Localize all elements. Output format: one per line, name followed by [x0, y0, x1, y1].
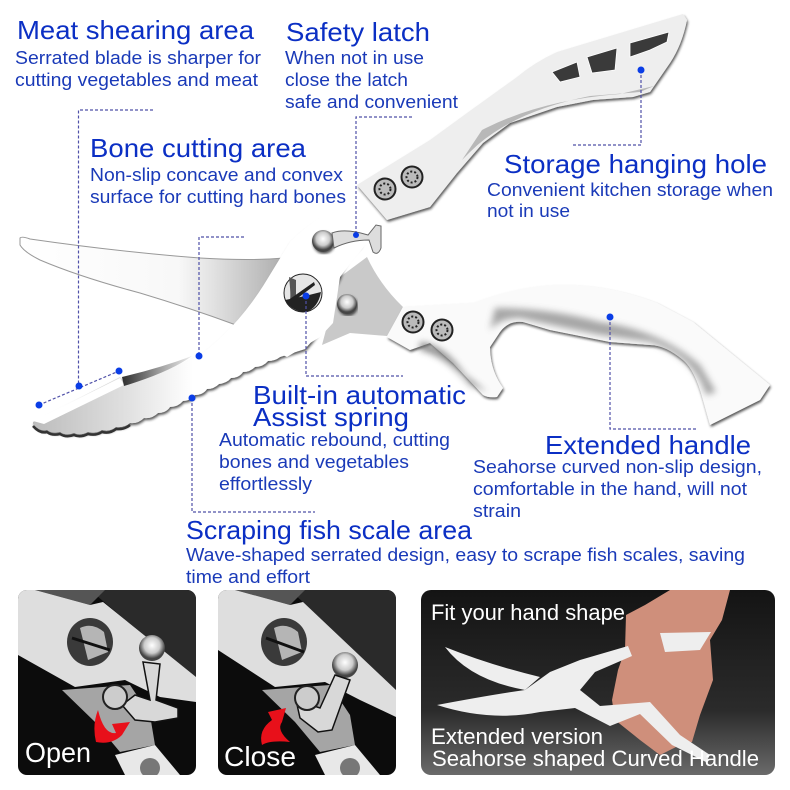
text: bone cutting area: Bone cutting area [90, 133, 307, 163]
spring wedge behind pivot [322, 257, 403, 345]
text: scraping fish scale area: Scraping fish scale area [186, 515, 473, 545]
text: built-in automatic assist spring [219, 380, 466, 494]
text: safety latch: safe and convenient [285, 92, 458, 112]
text: meat shearing area: Serrated blade is sharper for [15, 48, 261, 68]
white spine of lower blade [33, 378, 124, 424]
panel: open [18, 590, 196, 778]
text: storage hanging hole: Storage hanging hole [504, 149, 767, 179]
icon: red close arrow [261, 708, 290, 745]
serrated edge shadow [33, 425, 130, 436]
text: built-in automatic assist spring: effortlessly [219, 474, 312, 494]
scissors illustration [20, 14, 770, 436]
text: storage hanging hole [487, 149, 773, 221]
text: extended handle: Extended handle [545, 430, 751, 460]
text: built-in automatic assist spring: Built-in automatic [253, 380, 466, 410]
lower blade with serrated edge [33, 212, 366, 434]
text: extended handle: Seahorse curved non-slip design, [473, 457, 762, 477]
panel: close [218, 590, 396, 778]
spring pins [312, 230, 357, 314]
text: scraping fish scale area [186, 515, 745, 587]
text: bone cutting area: surface for cutting hard bones [90, 187, 346, 207]
upper handle [357, 14, 687, 220]
mini scissors [437, 632, 711, 762]
hand [612, 590, 730, 755]
icon: red open arrow [94, 710, 130, 743]
text: built-in automatic assist spring: Automatic rebound, cutting [219, 430, 450, 450]
text: built-in automatic assist spring: bones and vegetables [219, 452, 409, 472]
text: extended handle: strain [473, 501, 521, 521]
label: fit your hand shape: Fit your hand shape [431, 600, 625, 625]
text: safety latch: close the latch [285, 70, 408, 90]
text: storage hanging hole: Convenient kitchen storage when [487, 180, 773, 200]
upper blade [20, 237, 284, 325]
text: safety latch [285, 17, 458, 112]
text: meat shearing area [15, 15, 261, 90]
pivot plate [262, 187, 383, 357]
callout lines and dots [36, 66, 697, 512]
label: open: Open [25, 737, 91, 768]
handle rivets [402, 312, 452, 340]
text: meat shearing area: cutting vegetables and meat [15, 70, 258, 90]
text: bone cutting area [90, 133, 346, 207]
text: safety latch: When not in use [285, 48, 424, 68]
safety latch piece [332, 225, 381, 253]
pivot screw [284, 274, 322, 312]
text: safety latch: Safety latch [286, 17, 430, 47]
handle rivets [374, 166, 422, 200]
text: scraping fish scale area: Wave-shaped serrated design, easy to scrape fish scales, saving [186, 545, 745, 565]
text: extended handle: comfortable in the hand, will not [473, 479, 747, 499]
text: extended handle [473, 430, 762, 521]
lower handle [387, 285, 770, 425]
text: meat shearing area: Meat shearing area [17, 15, 255, 45]
label: extended version: Extended version [431, 724, 603, 749]
label: close: Close [224, 741, 296, 772]
storage hanging holes [552, 32, 669, 82]
text: bone cutting area: Non-slip concave and convex [90, 165, 343, 185]
label: seahorse shaped curved handle: Seahorse shaped Curved Handle [432, 746, 759, 771]
dark blade notch [122, 356, 192, 386]
text: scraping fish scale area: time and effort [186, 567, 310, 587]
text: built-in automatic assist spring: Assist spring [253, 402, 409, 432]
text: storage hanging hole: not in use [487, 201, 570, 221]
panel: fit your hand shape [421, 590, 775, 775]
